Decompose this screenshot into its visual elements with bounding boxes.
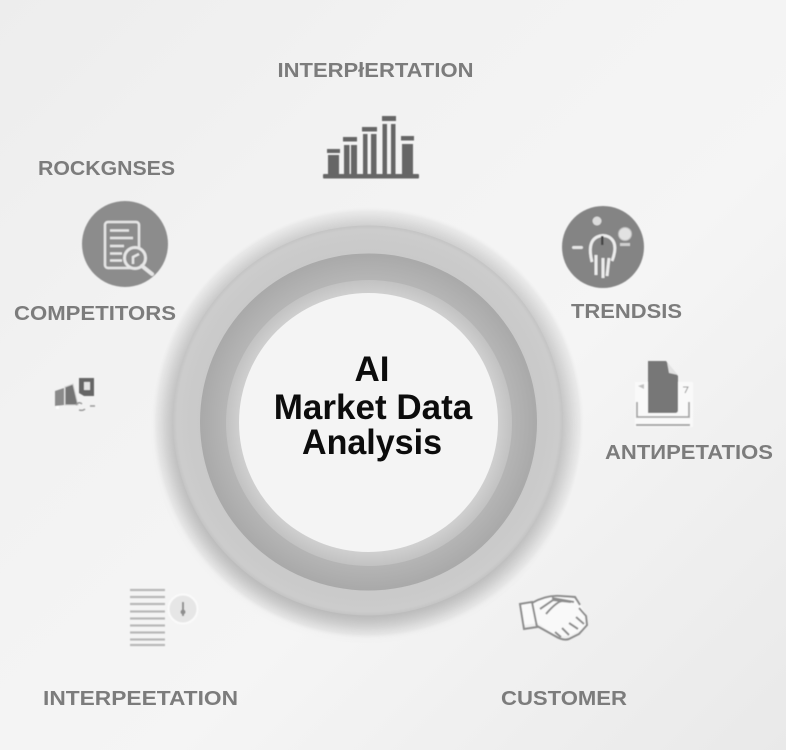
icon: bar chart: [323, 116, 419, 178]
heading: interpeetation bottom: INTERPEETATION: [43, 688, 238, 710]
central title: [274, 350, 473, 462]
central concentric ring diagram: [152, 207, 584, 639]
icon: handshake: [520, 596, 587, 640]
heading: antipetatios: ANTИPETATIOS: [605, 442, 773, 464]
icon: document in tray: [635, 361, 693, 427]
heading: customer: CUSTOMER: [501, 688, 628, 710]
icon: person with ideas: [562, 206, 644, 288]
central title: Market Data: [274, 388, 473, 427]
heading: competitors: COMPETITORS: [14, 303, 176, 325]
icon: small images cluster: [55, 378, 95, 410]
icon: document with magnifier: [82, 201, 168, 287]
heading: interpretation top: INTERPłERTATION: [278, 60, 474, 82]
central white circle: [239, 293, 498, 552]
heading: trendsis: TRENDSIS: [571, 301, 682, 323]
central title: AI: [354, 350, 390, 389]
icon: list with info badge: [129, 586, 198, 648]
heading: rockgnses: ROCKGNSES: [38, 158, 175, 180]
central title: Analysis: [302, 423, 442, 462]
